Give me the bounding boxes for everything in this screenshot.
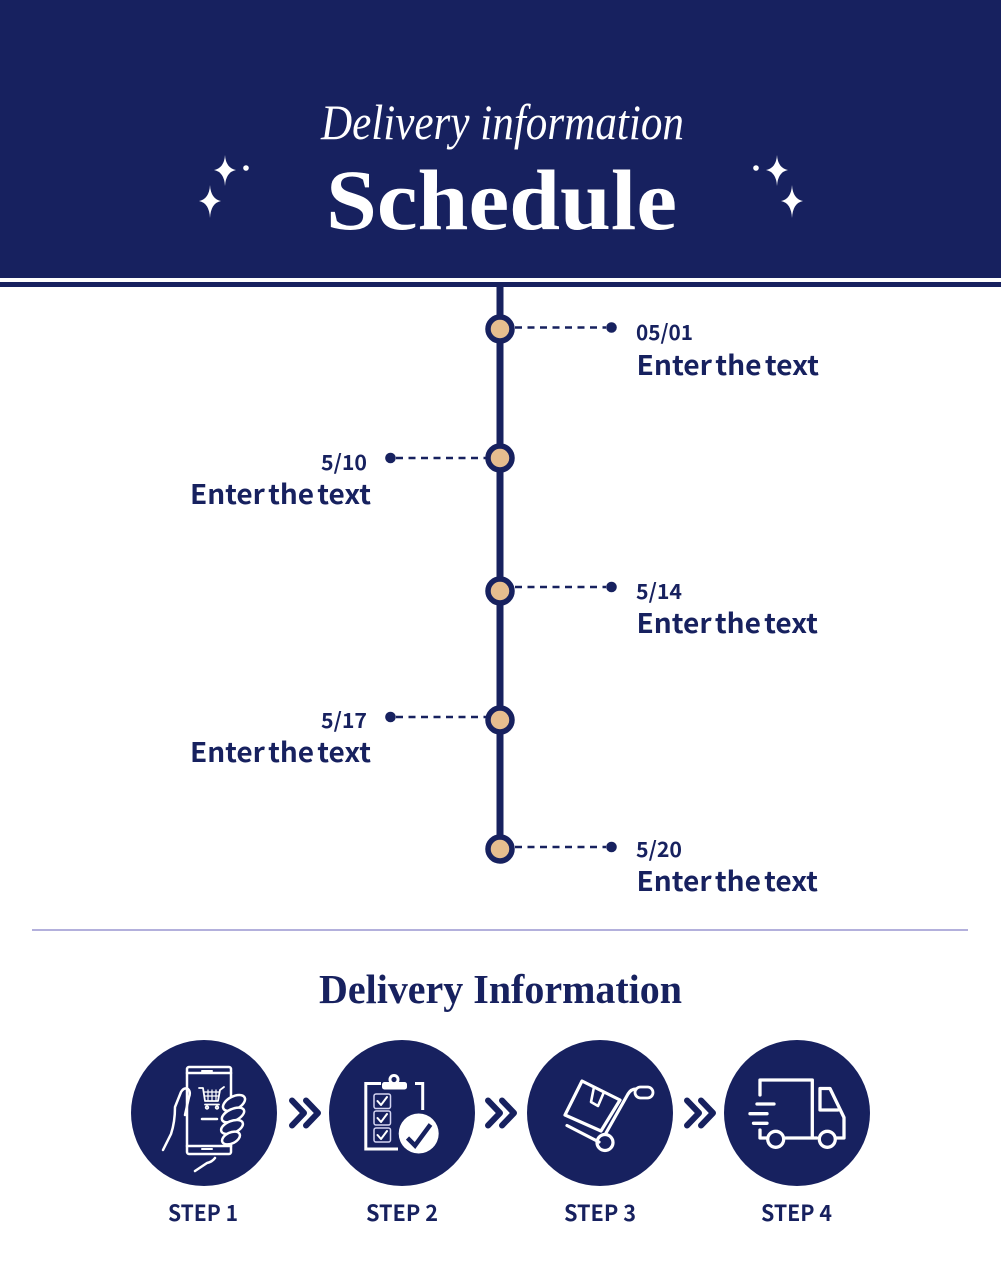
- milestone 5/20: [488, 834, 818, 899]
- milestone 05/01: 05/01: [636, 317, 693, 347]
- step labels: [168, 1196, 832, 1228]
- icon: phone in hand: [163, 1067, 248, 1171]
- icon: checklist clipboard: [366, 1074, 439, 1154]
- milestone 5/20: Enter the text: [636, 860, 818, 899]
- milestone 5/14: Enter the text: [636, 602, 818, 641]
- section heading: Delivery Information: [319, 966, 682, 1012]
- milestone 05/01: [488, 317, 819, 383]
- step 2: [329, 1040, 475, 1186]
- icon: delivery truck: [750, 1080, 844, 1147]
- timeline chart: [190, 287, 819, 899]
- step 4: [724, 1040, 870, 1186]
- arrow: step 3 to 4: [687, 1100, 713, 1126]
- panel: header: [0, 0, 1001, 287]
- script subtitle: Delivery information: [320, 94, 684, 150]
- icon: left sparkles: [199, 155, 249, 218]
- step 1: [131, 1040, 277, 1186]
- milestone 5/20: 5/20: [636, 834, 682, 864]
- arrow: step 1 to 2: [292, 1100, 318, 1126]
- hand fingers: [219, 1092, 248, 1147]
- milestone 5/14: [488, 576, 818, 641]
- step 3: [527, 1040, 673, 1186]
- step labels: STEP 2: [366, 1196, 438, 1228]
- milestone 5/17: Enter the text: [190, 731, 371, 770]
- cart: [199, 1087, 224, 1109]
- milestone 05/01: Enter the text: [636, 344, 819, 383]
- milestone 5/17: [190, 705, 512, 770]
- arrow: step 2 to 3: [488, 1100, 514, 1126]
- step labels: STEP 1: [168, 1196, 238, 1228]
- step labels: STEP 3: [564, 1196, 636, 1228]
- icon: hand truck with box: [565, 1081, 653, 1150]
- milestone 5/10: [190, 446, 512, 512]
- timeline axis: [496, 287, 504, 849]
- milestone 5/14: 5/14: [636, 576, 682, 606]
- milestone 5/17: 5/17: [321, 705, 367, 735]
- title: Schedule: [326, 152, 677, 248]
- milestone 5/10: Enter the text: [190, 473, 371, 512]
- step labels: STEP 4: [761, 1196, 832, 1228]
- icon: right sparkles: [753, 155, 803, 218]
- milestone 5/10: 5/10: [321, 447, 367, 477]
